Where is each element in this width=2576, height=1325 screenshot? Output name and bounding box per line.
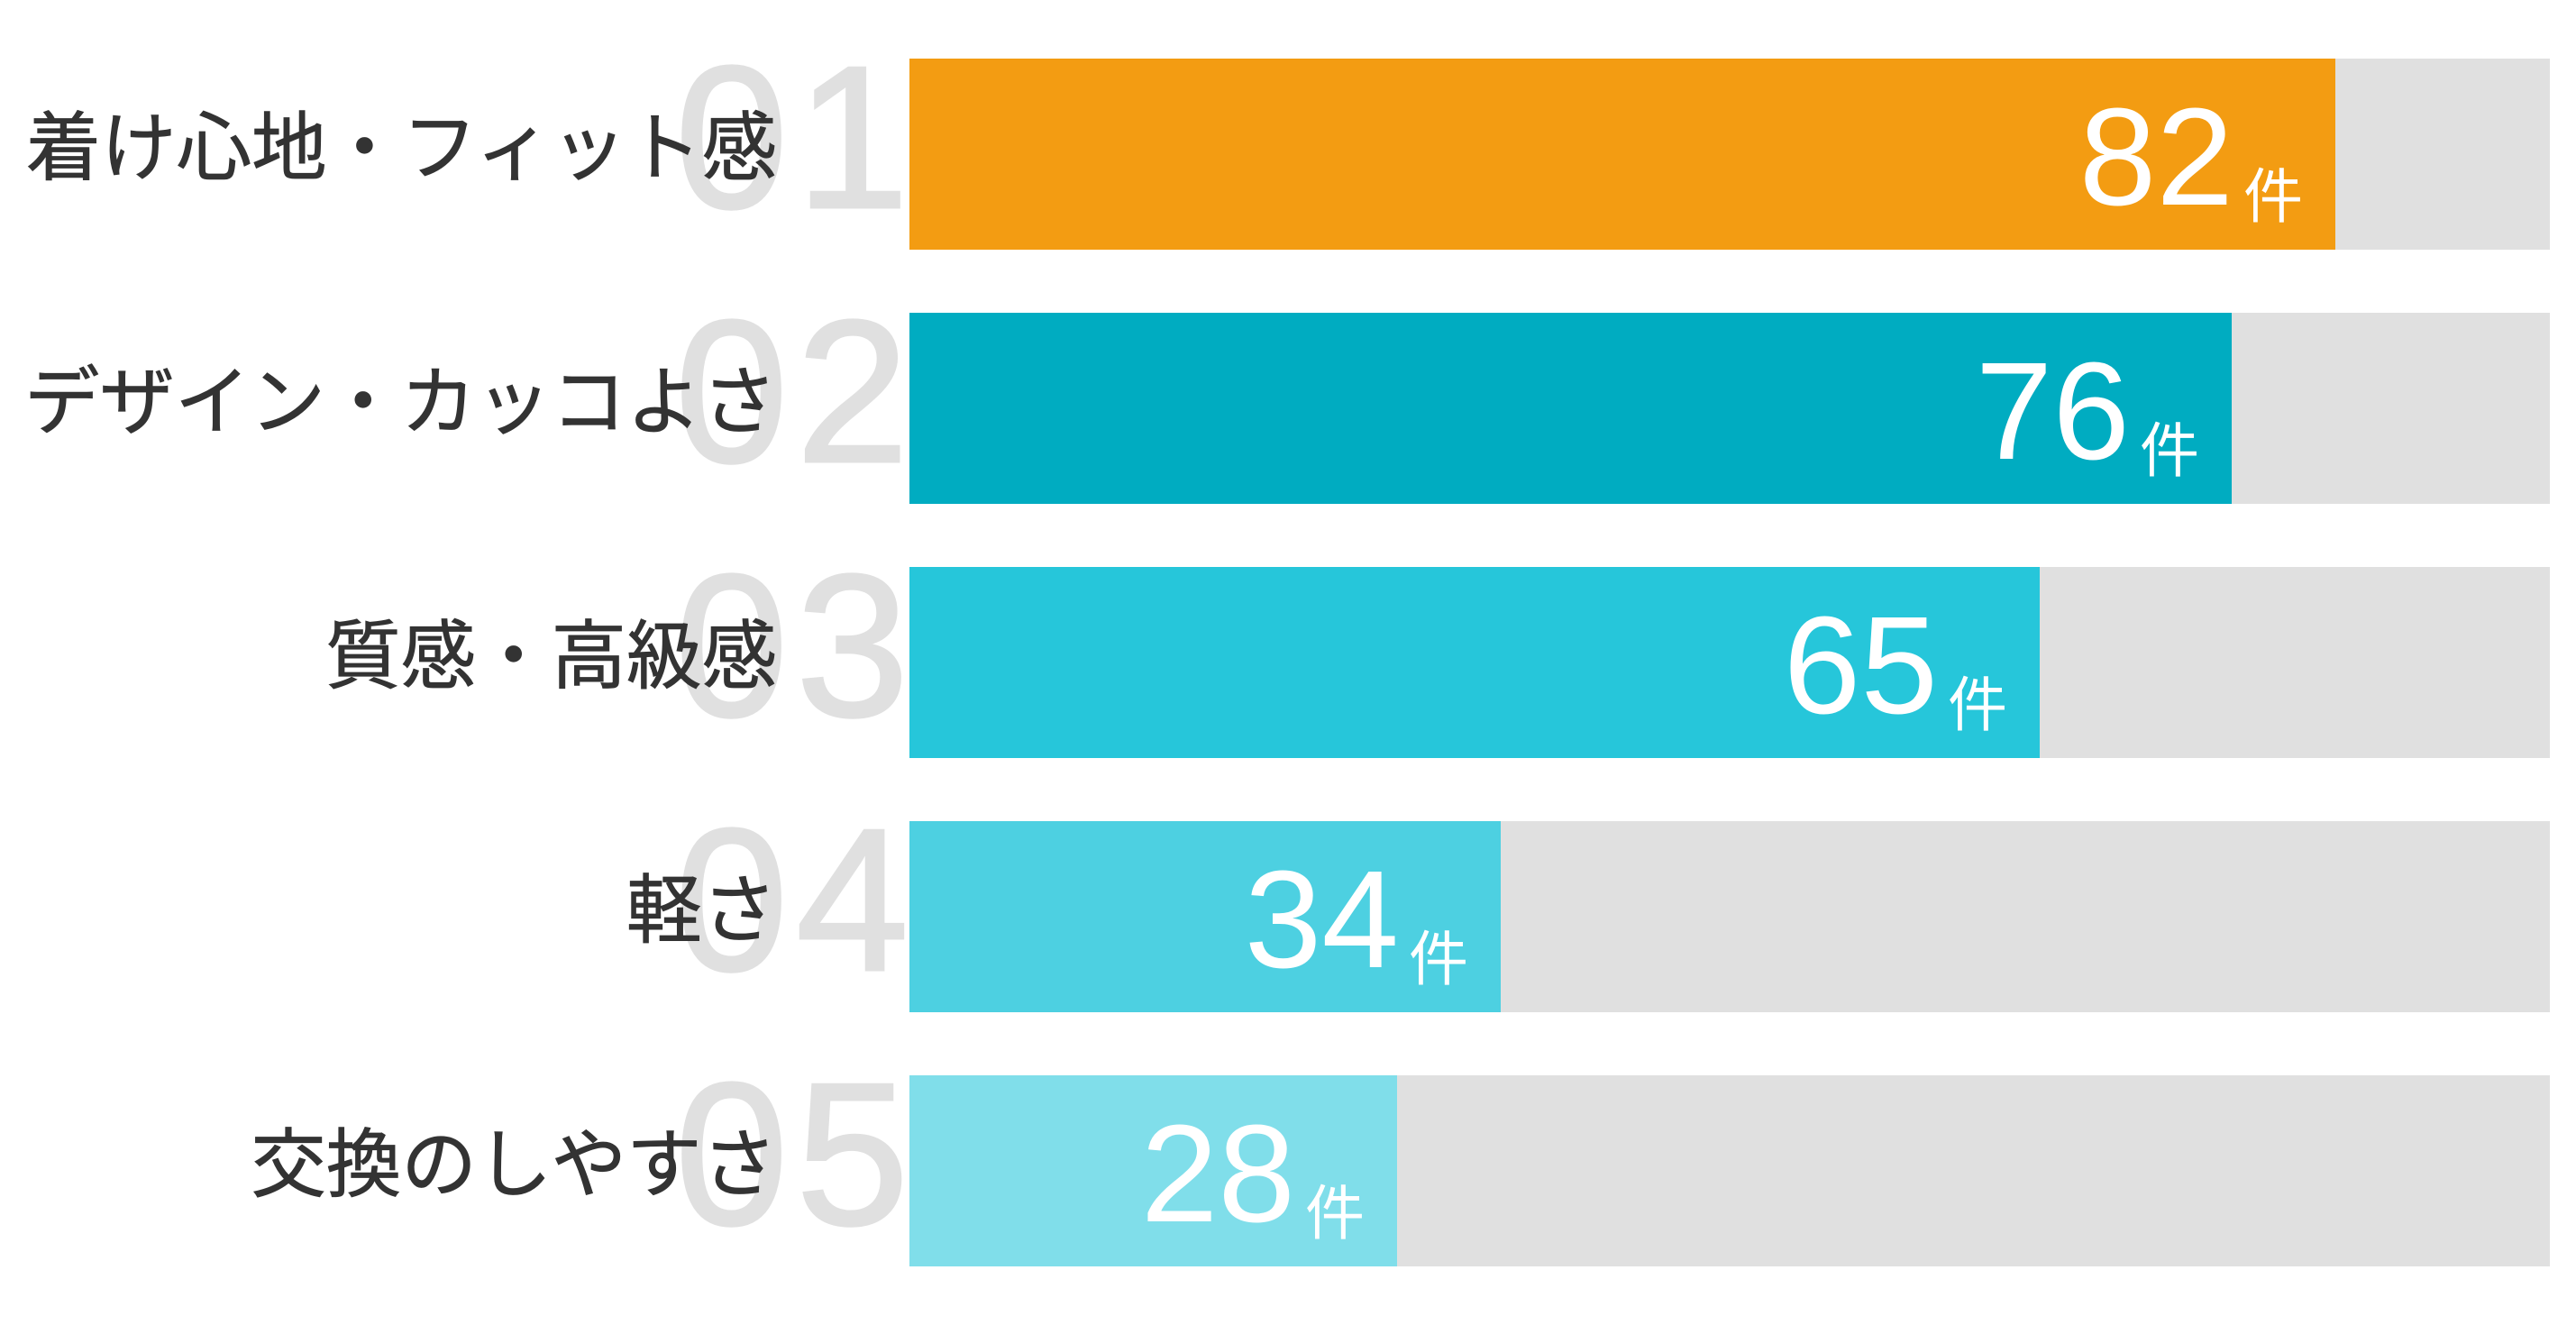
rank number 03: 03 xyxy=(675,532,917,759)
unit: 件 xyxy=(1305,1180,1365,1247)
label: lightness: 軽さ xyxy=(626,868,777,953)
rank number 01: 01 xyxy=(675,23,917,251)
label: ease of replacement: 交換のしやすさ xyxy=(251,1122,777,1207)
label: design: デザイン・カッコよさ xyxy=(24,360,777,444)
bar value 65 xyxy=(909,567,2040,758)
rank number 02: 02 xyxy=(675,278,917,505)
unit: 件 xyxy=(1948,672,2007,738)
unit: 件 xyxy=(1409,926,1468,992)
rank number 05: 05 xyxy=(675,1040,917,1267)
value 65: 65 xyxy=(1784,588,1938,743)
bar value 82 xyxy=(909,59,2335,250)
row 5: ease of replacement xyxy=(251,1040,2550,1267)
bar value 34 xyxy=(909,821,1501,1012)
bar value 28 xyxy=(909,1075,1397,1266)
bar track 2 xyxy=(909,313,2550,504)
bar track 4 xyxy=(909,821,2550,1012)
value 76: 76 xyxy=(1976,334,2130,489)
label: fit: 着け心地・フィット感 xyxy=(26,105,777,190)
row 3: quality xyxy=(325,532,2550,759)
bar track 3 xyxy=(909,567,2550,758)
value 34: 34 xyxy=(1245,842,1399,997)
bar value 76 xyxy=(909,313,2232,504)
value 82: 82 xyxy=(2079,79,2233,234)
row 4: lightness xyxy=(626,786,2550,1013)
unit: 件 xyxy=(2243,163,2303,230)
row 2: design xyxy=(24,278,2550,505)
bar track 1 xyxy=(909,59,2550,250)
rank number 04: 04 xyxy=(675,786,917,1013)
value 28: 28 xyxy=(1141,1096,1295,1251)
bar track 5 xyxy=(909,1075,2550,1266)
unit: 件 xyxy=(2140,417,2199,484)
label: quality: 質感・高級感 xyxy=(325,614,777,699)
row 1: fit xyxy=(26,23,2550,251)
